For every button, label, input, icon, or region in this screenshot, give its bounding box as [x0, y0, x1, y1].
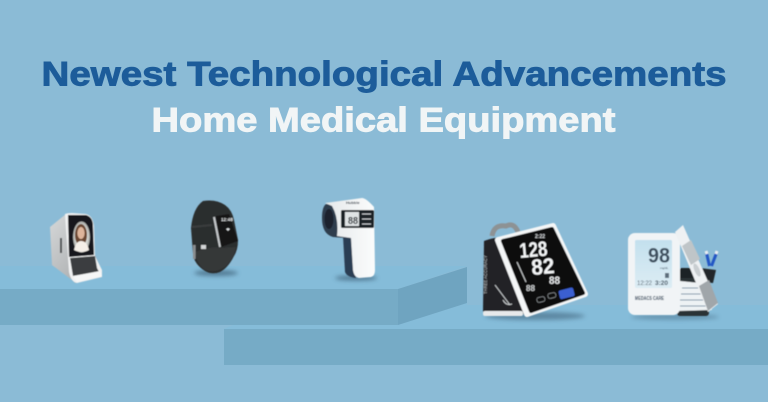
device: blood pressure monitor with cuff: [483, 225, 585, 320]
device: telehealth kiosk: [50, 213, 102, 283]
heading line 1: Newest Technological Advancements: [42, 56, 726, 94]
device: glucose meter kit: 12:22: [637, 281, 653, 287]
meter body: [628, 233, 680, 315]
device: blood pressure monitor with cuff: 2:22: [535, 234, 545, 240]
lower platform: [224, 303, 768, 365]
portrait on screen: [73, 222, 90, 252]
device: glucose meter kit: 98: [648, 244, 670, 268]
title: [42, 56, 726, 140]
device: blood pressure monitor with cuff: THREE ACCURACY: [483, 255, 488, 294]
device: infrared thermometer: 88: [348, 216, 358, 227]
device: blood pressure monitor with cuff: 128: [518, 238, 549, 263]
heading line 2: Home Medical Equipment: [152, 102, 616, 140]
lancing device: [675, 225, 718, 312]
left platform: [0, 266, 467, 325]
device: blood pressure monitor with cuff: 88: [549, 275, 560, 287]
device: glucose meter kit: 3:20: [655, 280, 668, 287]
device: blood pressure monitor with cuff: 88: [526, 284, 536, 293]
device: glucose meter kit: [628, 225, 719, 320]
device: fitness band: 12:48: [221, 217, 233, 222]
device: fitness band: [191, 200, 238, 276]
device: glucose meter kit: mg/dL: [660, 266, 669, 270]
device: infrared thermometer: Hubble: [346, 200, 360, 205]
test strips: [706, 251, 717, 266]
medicine bottle: [677, 268, 716, 316]
device: blood pressure monitor with cuff: 82: [530, 253, 555, 280]
device: glucose meter kit: MEDACS CARE: [635, 296, 665, 302]
device: infrared thermometer: [322, 198, 377, 281]
